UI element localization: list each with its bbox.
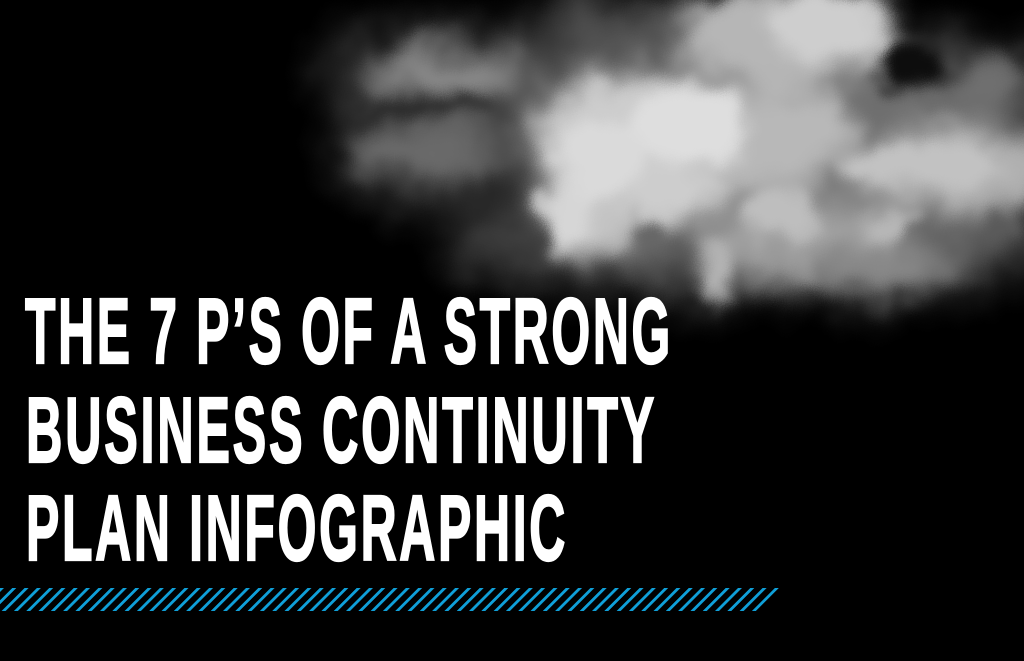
cloud image xyxy=(320,0,1024,301)
title xyxy=(25,279,673,580)
striped divider xyxy=(0,588,779,611)
title: PLAN INFOGRAPHIC xyxy=(26,476,568,580)
